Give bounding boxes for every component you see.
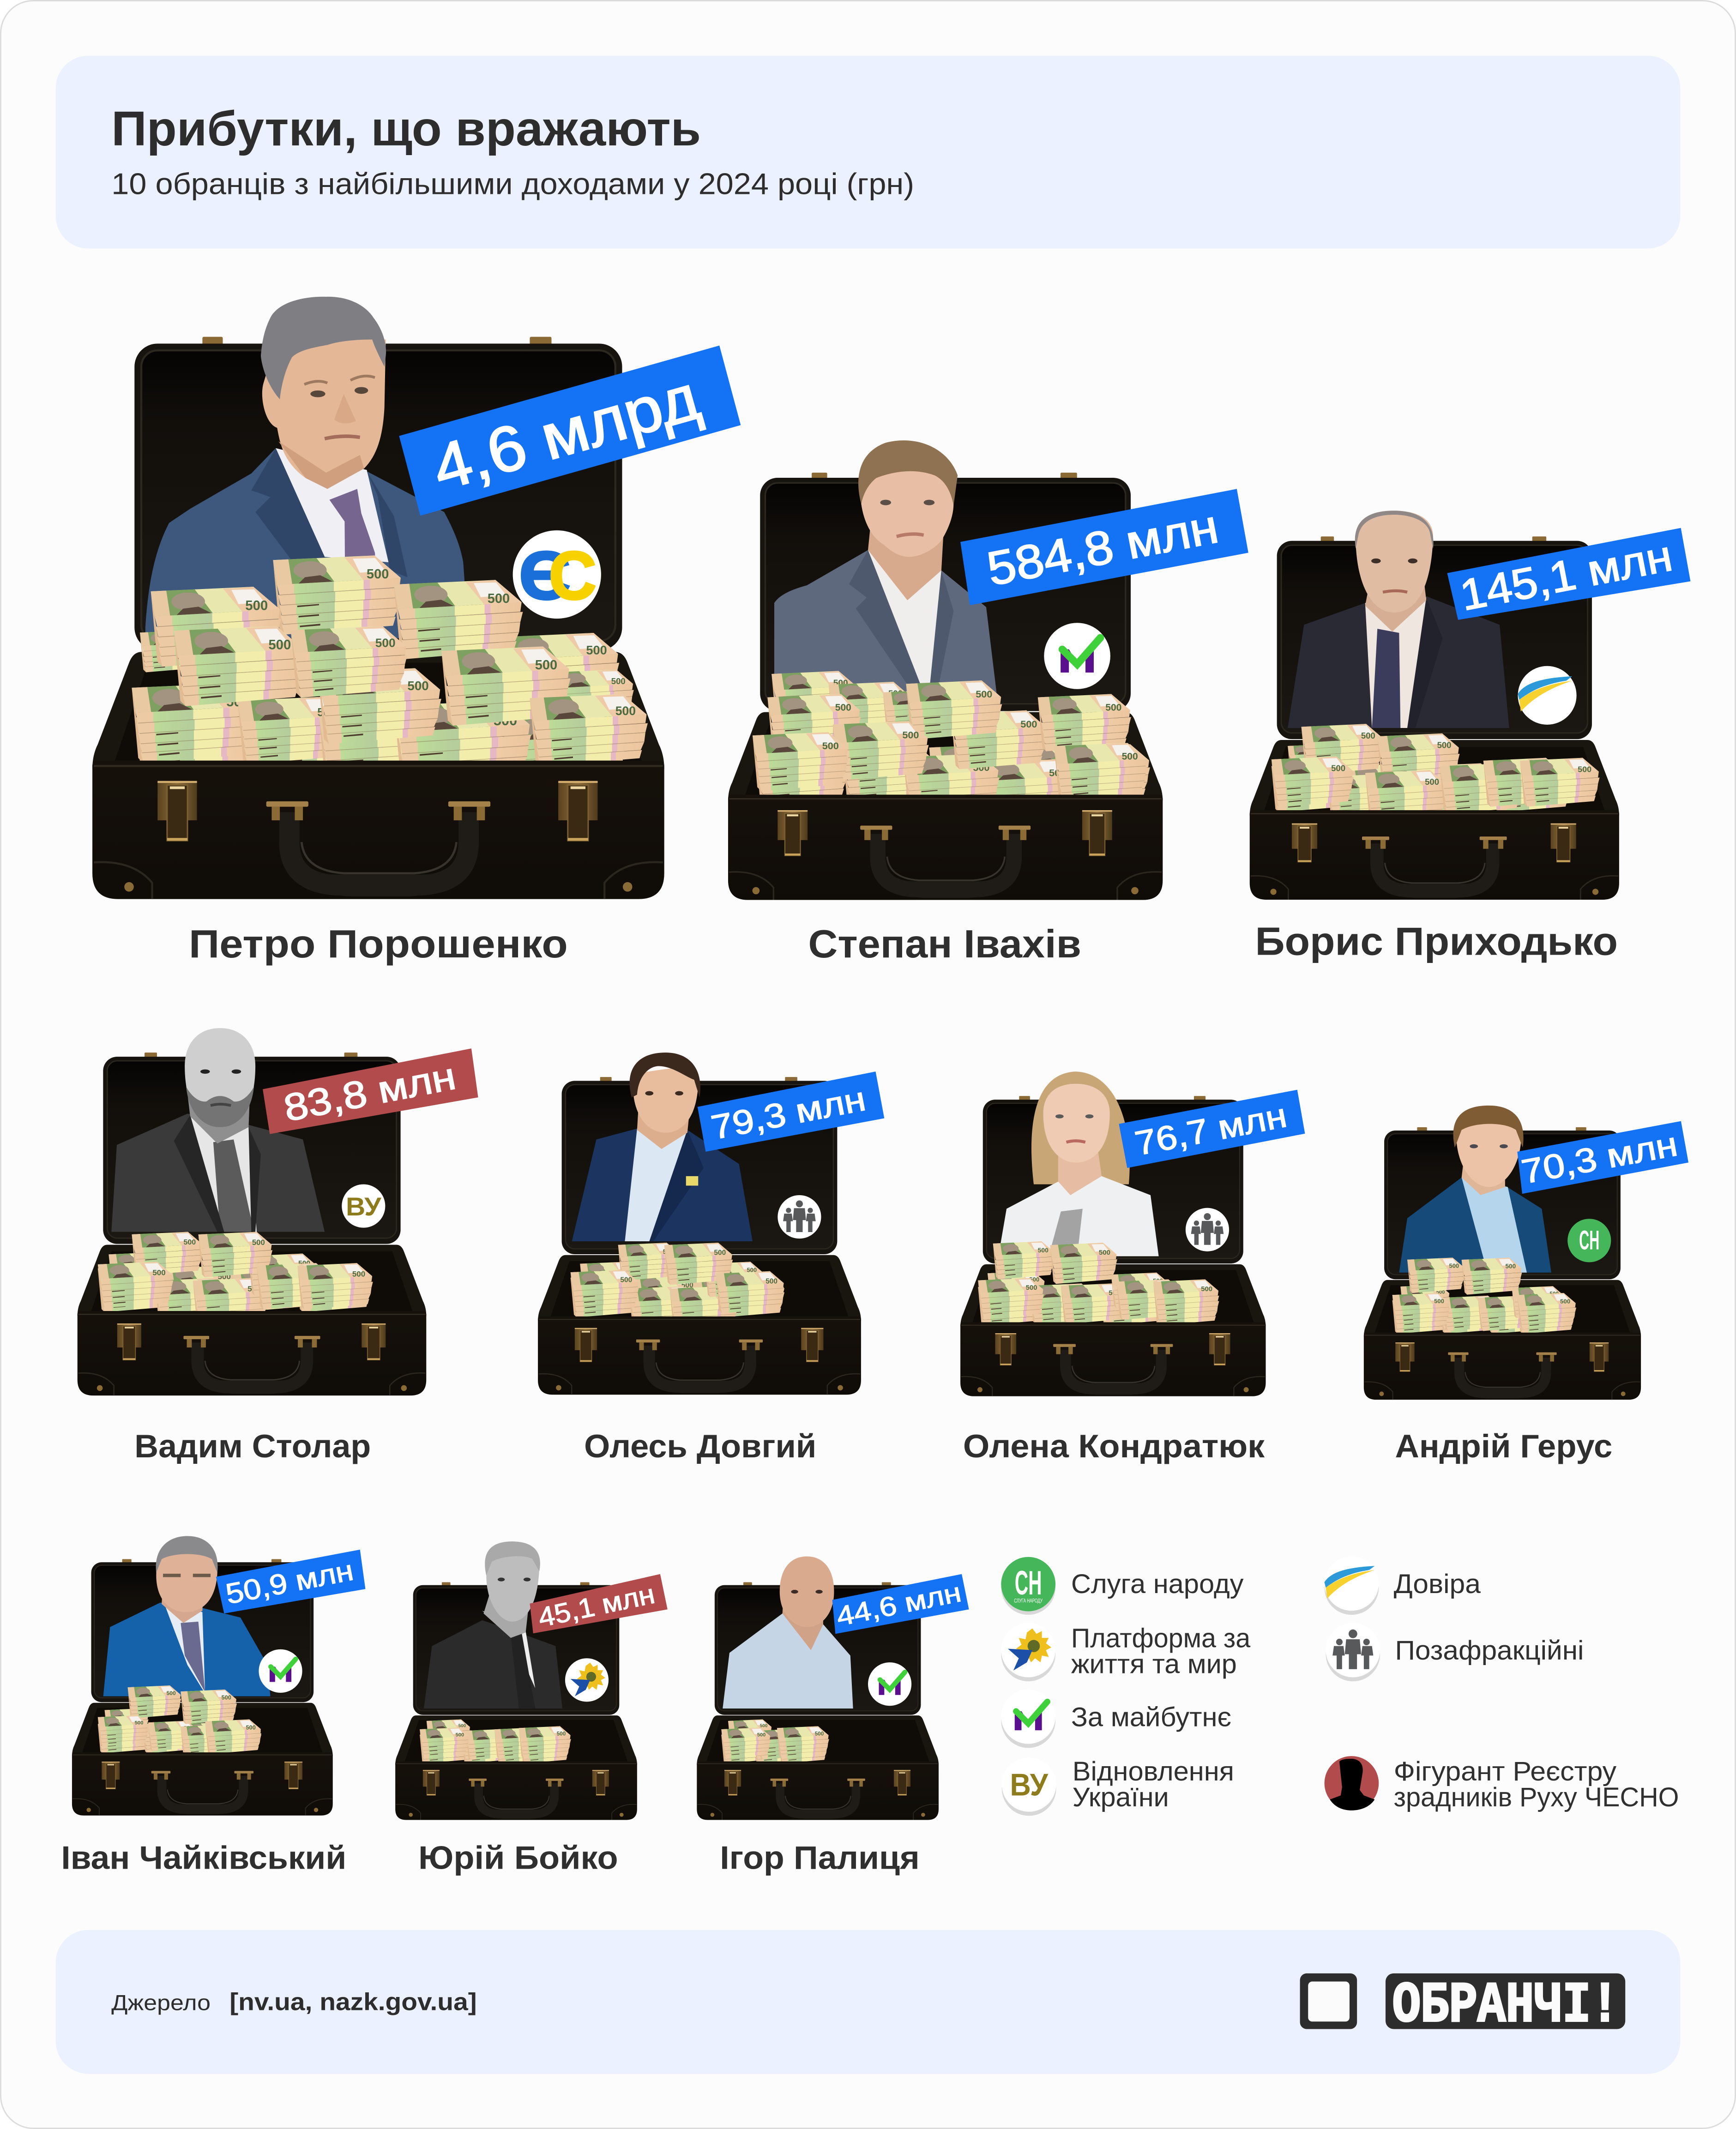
legend item: Платформа за життя та мир: [1001, 1623, 1250, 1681]
party badge: ЄС: Є: [519, 538, 571, 613]
money pile: [721, 1720, 829, 1763]
source: Джерело: [111, 1990, 211, 2015]
party badge: [1186, 1208, 1229, 1251]
case: Олена Кондратюк: [960, 1071, 1305, 1396]
legend item: Слуга народу: [1001, 1557, 1244, 1615]
portrait: Порошенко: [145, 297, 469, 638]
header panel: [56, 56, 1680, 248]
portrait: Столар: [111, 1028, 325, 1232]
money pile: [98, 1685, 261, 1755]
logo: Обранці: ОБРАНЧІ!: [1392, 1974, 1619, 2039]
legend item: За майбутнє: [1001, 1690, 1231, 1748]
legend item: Відновлення України: України: [1073, 1782, 1169, 1812]
name: Андрій Герус: [1395, 1428, 1612, 1464]
legend: [1001, 1557, 1679, 1816]
source: [111, 1988, 477, 2015]
legend item: Відновлення України: [1002, 1756, 1234, 1816]
amount tag: 50,9 млн: [223, 1554, 356, 1611]
amount tag: [399, 345, 741, 516]
name: Петро Порошенко: [189, 922, 568, 966]
money pile: [1272, 724, 1600, 821]
portrait: Чайківський: [103, 1536, 270, 1696]
portrait: Кондратюк: [998, 1071, 1159, 1256]
title: Прибутки, що вражають: [111, 102, 701, 156]
amount tag: [960, 489, 1248, 605]
amount tag: [263, 1048, 478, 1134]
party badge: ВУ: [342, 1184, 385, 1228]
case: Андрій Герус: [1364, 1106, 1688, 1400]
case: Юрій Бойко: [395, 1541, 668, 1820]
case: Іван Чайківський: [72, 1536, 365, 1816]
amount tag: 145,1 млн: [1456, 531, 1676, 619]
legend item: Фігурант Реєстру зрадників: Фігурант Реєстру: [1394, 1756, 1617, 1786]
amount tag: 44,6 млн: [834, 1577, 964, 1632]
portrait: Герус: [1399, 1106, 1551, 1273]
money pile: [978, 1241, 1219, 1325]
name: Олена Кондратюк: [963, 1428, 1265, 1464]
portrait: Палиця: [723, 1557, 853, 1708]
money pile: [132, 555, 648, 789]
case: Петро Порошенко: [92, 297, 741, 899]
money pile: [753, 671, 1150, 818]
legend item: Слуга народу: СН: [1015, 1564, 1042, 1602]
party badge: СН: СН: [1579, 1226, 1599, 1256]
party badge: [1044, 623, 1110, 689]
money pile: [571, 1243, 784, 1328]
party badge: [259, 1649, 302, 1693]
portrait: Приходько: [1288, 511, 1509, 728]
legend item: Фігурант Реєстру зрадників: [1325, 1756, 1679, 1812]
name: Юрій Бойко: [418, 1839, 618, 1876]
subtitle: 10 обранців з найбільшими доходами у 2024 році (грн): [111, 167, 914, 201]
amount tag: [1119, 1090, 1305, 1168]
legend item: Фігурант Реєстру зрадників: зрадників Руху ЧЕСНО: [1394, 1782, 1679, 1812]
name: Вадим Столар: [134, 1428, 371, 1464]
portrait: Івахів: [774, 440, 997, 720]
amount tag: 45,1 млн: [536, 1579, 657, 1633]
legend item: Відновлення України: Відновлення: [1073, 1756, 1234, 1786]
amount tag: 79,3 млн: [708, 1079, 868, 1147]
amount tag: 4,6 млрд: [425, 361, 707, 504]
logo: Обранці: [1300, 1973, 1625, 2039]
legend item: Слуга народу: СЛУГА НАРОДУ: [1014, 1598, 1043, 1604]
party badge: ВУ: ВУ: [346, 1192, 382, 1221]
source: [nv.ua, nazk.gov.ua]: [229, 1988, 477, 2015]
party badge: [1518, 666, 1577, 725]
money pile: [420, 1720, 571, 1763]
legend item: Довіра: Довіра: [1394, 1569, 1481, 1599]
party badge: [868, 1662, 911, 1706]
name: Степан Івахів: [808, 922, 1081, 966]
amount tag: 70,3 млн: [1519, 1125, 1680, 1191]
money pile: [1392, 1257, 1576, 1334]
footer panel: [56, 1930, 1680, 2074]
portrait: Бойко: [424, 1541, 562, 1708]
legend item: Платформа за життя та мир: Платформа за: [1071, 1624, 1250, 1654]
party badge: ЄС: [513, 530, 601, 619]
party badge: [565, 1658, 609, 1702]
amount tag: 83,8 млн: [280, 1055, 459, 1130]
legend item: Платформа за життя та мир: життя та мир: [1071, 1649, 1237, 1679]
amount tag: [216, 1550, 365, 1613]
case: Ігор Палиця: [697, 1557, 969, 1820]
amount tag: 584,8 млн: [983, 499, 1222, 595]
portrait: Довгий: [572, 1052, 753, 1241]
amount tag: [698, 1071, 884, 1152]
legend item: Довіра: [1325, 1557, 1481, 1615]
case: Борис Приходько: [1250, 511, 1690, 900]
legend item: Позафракційні: [1326, 1623, 1584, 1681]
name: Іван Чайківський: [61, 1839, 346, 1876]
legend item: Слуга народу: Слуга народу: [1071, 1569, 1244, 1599]
legend item: За майбутнє: За майбутнє: [1071, 1702, 1231, 1732]
amount tag: 76,7 млн: [1132, 1096, 1290, 1163]
case: Вадим Столар: [78, 1028, 478, 1395]
name: Олесь Довгий: [584, 1428, 816, 1464]
party badge: СН: [1567, 1219, 1611, 1262]
name: Борис Приходько: [1255, 920, 1618, 963]
legend item: Відновлення України: ВУ: [1010, 1768, 1049, 1802]
legend item: Позафракційні: Позафракційні: [1395, 1636, 1584, 1666]
money pile: [98, 1232, 373, 1324]
case: Олесь Довгий: [538, 1052, 884, 1395]
name: Ігор Палиця: [720, 1839, 920, 1876]
party badge: [778, 1195, 821, 1239]
party badge: ЄС: С: [549, 538, 597, 613]
case: Степан Івахів: [728, 440, 1248, 900]
